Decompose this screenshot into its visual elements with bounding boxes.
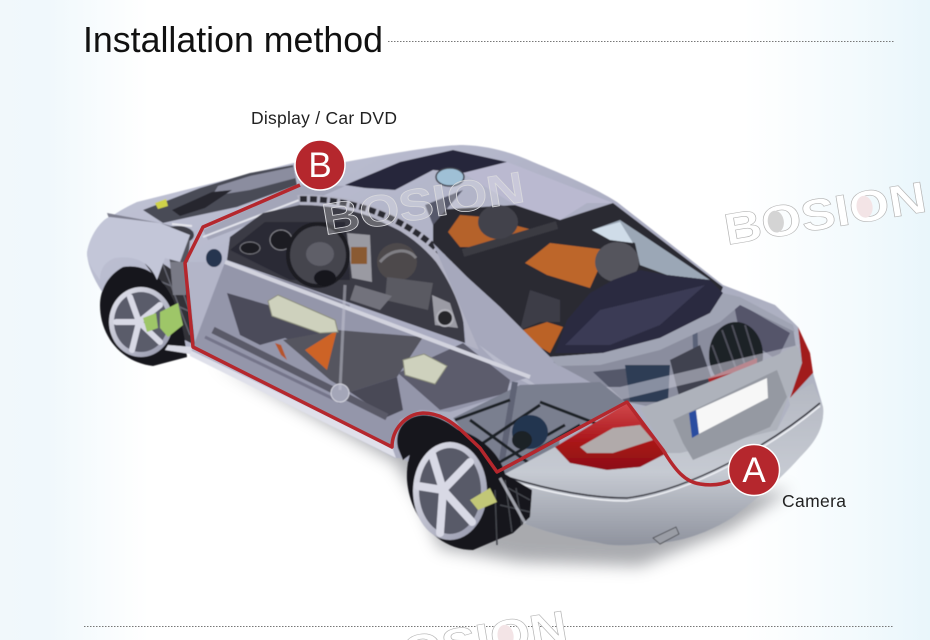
engine bay and hood bbox=[107, 165, 345, 240]
front wheel bbox=[100, 266, 187, 366]
rear wheel arch bbox=[397, 415, 495, 480]
red wire route bbox=[185, 185, 732, 485]
rear suspension bbox=[453, 382, 625, 480]
car body silhouette bbox=[87, 145, 823, 545]
rear parcel shelf bbox=[555, 270, 723, 353]
marker B: B bbox=[308, 146, 332, 185]
ground shadow bbox=[215, 362, 790, 566]
taillight right bbox=[790, 327, 813, 398]
taillight left bbox=[555, 403, 667, 470]
fender lower trim bbox=[165, 345, 193, 354]
title: Installation method bbox=[83, 19, 383, 60]
roof panel bbox=[463, 162, 613, 220]
car illustration bbox=[87, 145, 823, 550]
marker B bbox=[295, 140, 345, 190]
front fender bbox=[87, 217, 190, 280]
watermark: on car: BOSION bbox=[319, 163, 528, 245]
rear wheel bbox=[407, 426, 532, 550]
sunroof bbox=[345, 150, 507, 190]
door panel bbox=[193, 262, 530, 447]
steering wheel bbox=[288, 224, 348, 286]
cabin interior front bbox=[225, 202, 465, 343]
rear quarter panel bbox=[433, 243, 625, 400]
roof arc with dark trim bbox=[297, 195, 479, 350]
rear bumper bbox=[503, 345, 823, 545]
license plate bbox=[689, 378, 768, 438]
translucent rear fender edge bbox=[500, 478, 525, 523]
hinge column bbox=[186, 262, 226, 352]
door mechanism front bbox=[268, 295, 338, 333]
marker A bbox=[728, 444, 780, 496]
sill strip bbox=[190, 350, 396, 458]
rearview mirror bbox=[436, 168, 464, 186]
door mirror bbox=[206, 249, 222, 267]
label: camera: Camera bbox=[782, 491, 846, 511]
door mechanism rear bbox=[403, 354, 447, 384]
suspension strut bbox=[162, 224, 194, 295]
watermark: bottom bbox=[407, 610, 566, 640]
front tread seen through fender bbox=[140, 257, 207, 345]
label: display: Display / Car DVD bbox=[251, 108, 397, 128]
watermark: right: BOSION bbox=[721, 173, 930, 255]
trunk and rear structure bbox=[550, 293, 798, 415]
exhaust tip bbox=[653, 527, 679, 544]
rear cabin bbox=[425, 190, 723, 357]
marker A: A bbox=[742, 451, 766, 490]
